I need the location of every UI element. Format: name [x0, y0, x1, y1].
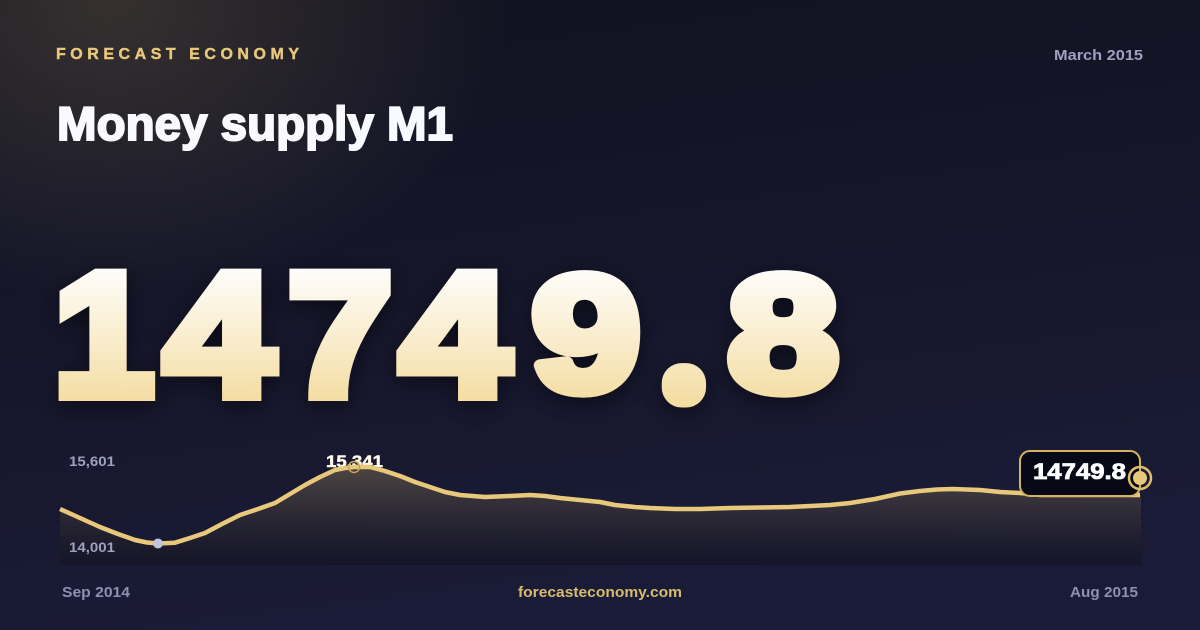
- axis max label: 15,601: [69, 453, 115, 469]
- latest value callout: [1020, 451, 1140, 496]
- headline value: 4: [400, 238, 510, 433]
- latest point marker: [1129, 467, 1151, 489]
- headline value: 8: [728, 242, 838, 425]
- axis min label: 14,001: [69, 539, 115, 555]
- trend line: [60, 467, 1140, 544]
- low point marker: [153, 538, 163, 548]
- latest value callout: 14749.8: [1033, 459, 1126, 484]
- date: March 2015: [1054, 47, 1143, 64]
- headline value: 7: [288, 238, 392, 433]
- title: Money supply M1: [57, 97, 453, 150]
- end date: Aug 2015: [1070, 584, 1138, 601]
- peak marker: [348, 462, 360, 472]
- start date: Sep 2014: [62, 584, 131, 601]
- area under line: [60, 467, 1141, 565]
- website: forecasteconomy.com: [518, 584, 682, 601]
- headline value: [53, 238, 838, 433]
- headline value: 1: [53, 238, 154, 433]
- headline value: .: [680, 362, 688, 395]
- headline value: 9: [532, 242, 640, 425]
- brand eyebrow: FORECAST ECONOMY: [56, 46, 299, 63]
- peak label: 15,341: [326, 452, 383, 471]
- sparkline chart: [60, 451, 1151, 565]
- headline value: 4: [164, 238, 274, 433]
